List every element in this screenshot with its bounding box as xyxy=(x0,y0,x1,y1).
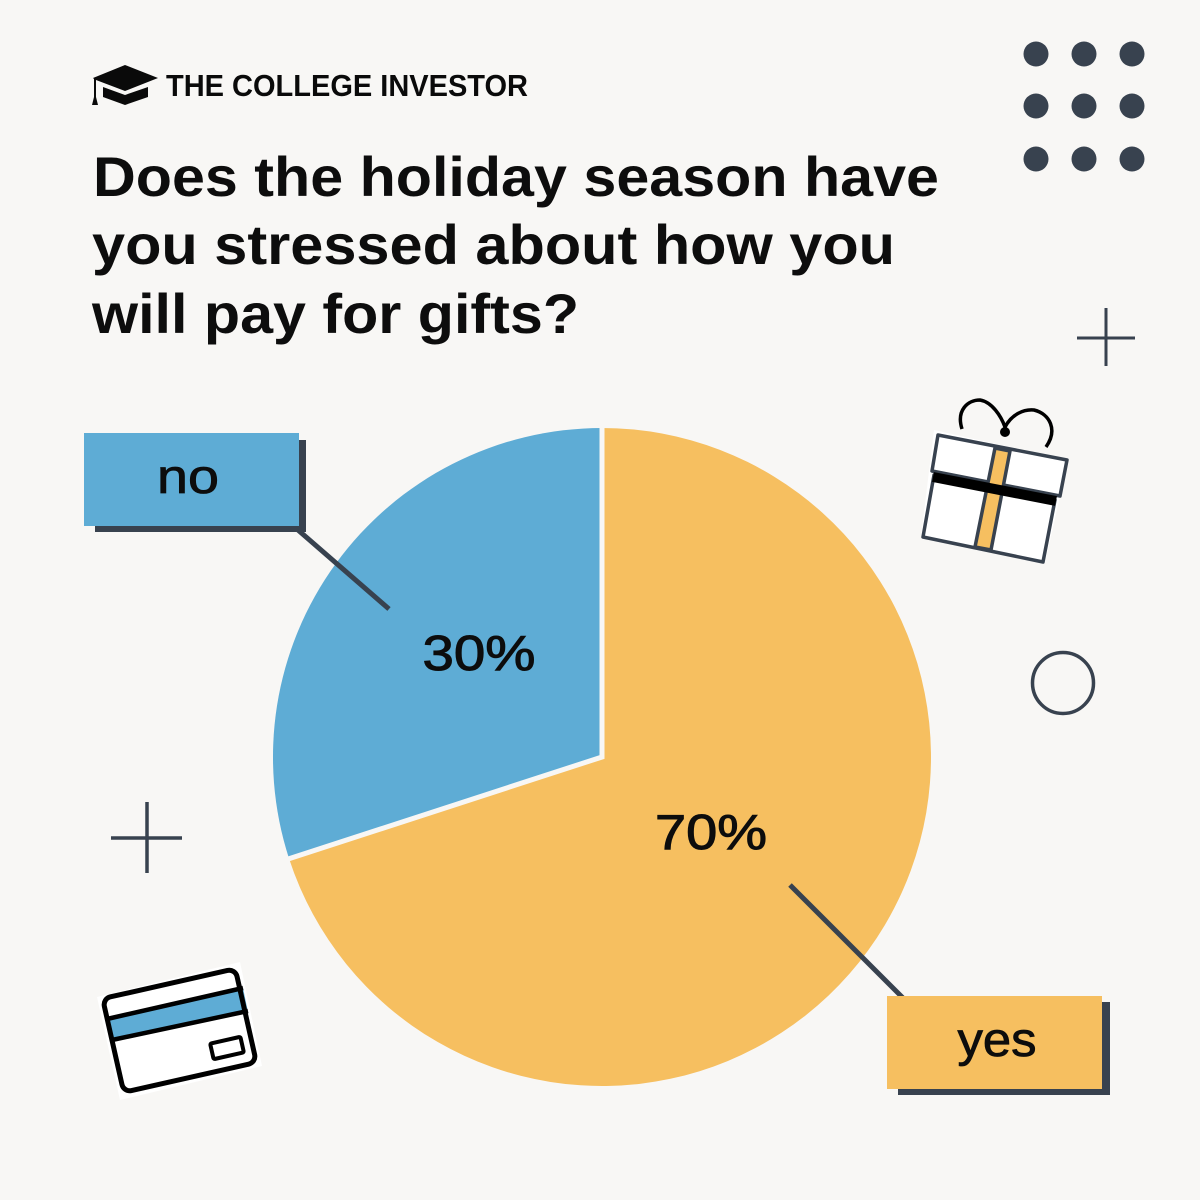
icon: credit card xyxy=(97,962,262,1100)
decorative plus top right xyxy=(1077,308,1135,366)
decorative dot grid xyxy=(1024,42,1144,172)
decorative plus left xyxy=(111,802,182,873)
pie chart xyxy=(273,426,931,1086)
slice: no 30% xyxy=(273,428,602,859)
leader line: yes xyxy=(790,885,905,1000)
label: yes xyxy=(887,996,1110,1095)
label: no xyxy=(84,433,306,532)
label: yes: yes xyxy=(958,1014,1036,1067)
title: Does the holiday season have xyxy=(93,145,939,208)
icon: gift box xyxy=(921,400,1068,563)
logo wordmark: THE COLLEGE INVESTOR xyxy=(166,68,528,103)
leader line: no xyxy=(298,530,389,609)
title: you stressed about how you xyxy=(92,213,895,276)
label: no: no xyxy=(157,451,219,504)
decorative circle xyxy=(1032,652,1094,714)
value: 30%: 30% xyxy=(422,627,536,681)
title xyxy=(91,145,939,345)
value: 70%: 70% xyxy=(655,806,767,860)
logo: graduation cap xyxy=(92,65,158,105)
title: will pay for gifts? xyxy=(91,282,579,345)
slice: yes 70% xyxy=(289,428,931,1086)
slice separators xyxy=(287,426,602,859)
